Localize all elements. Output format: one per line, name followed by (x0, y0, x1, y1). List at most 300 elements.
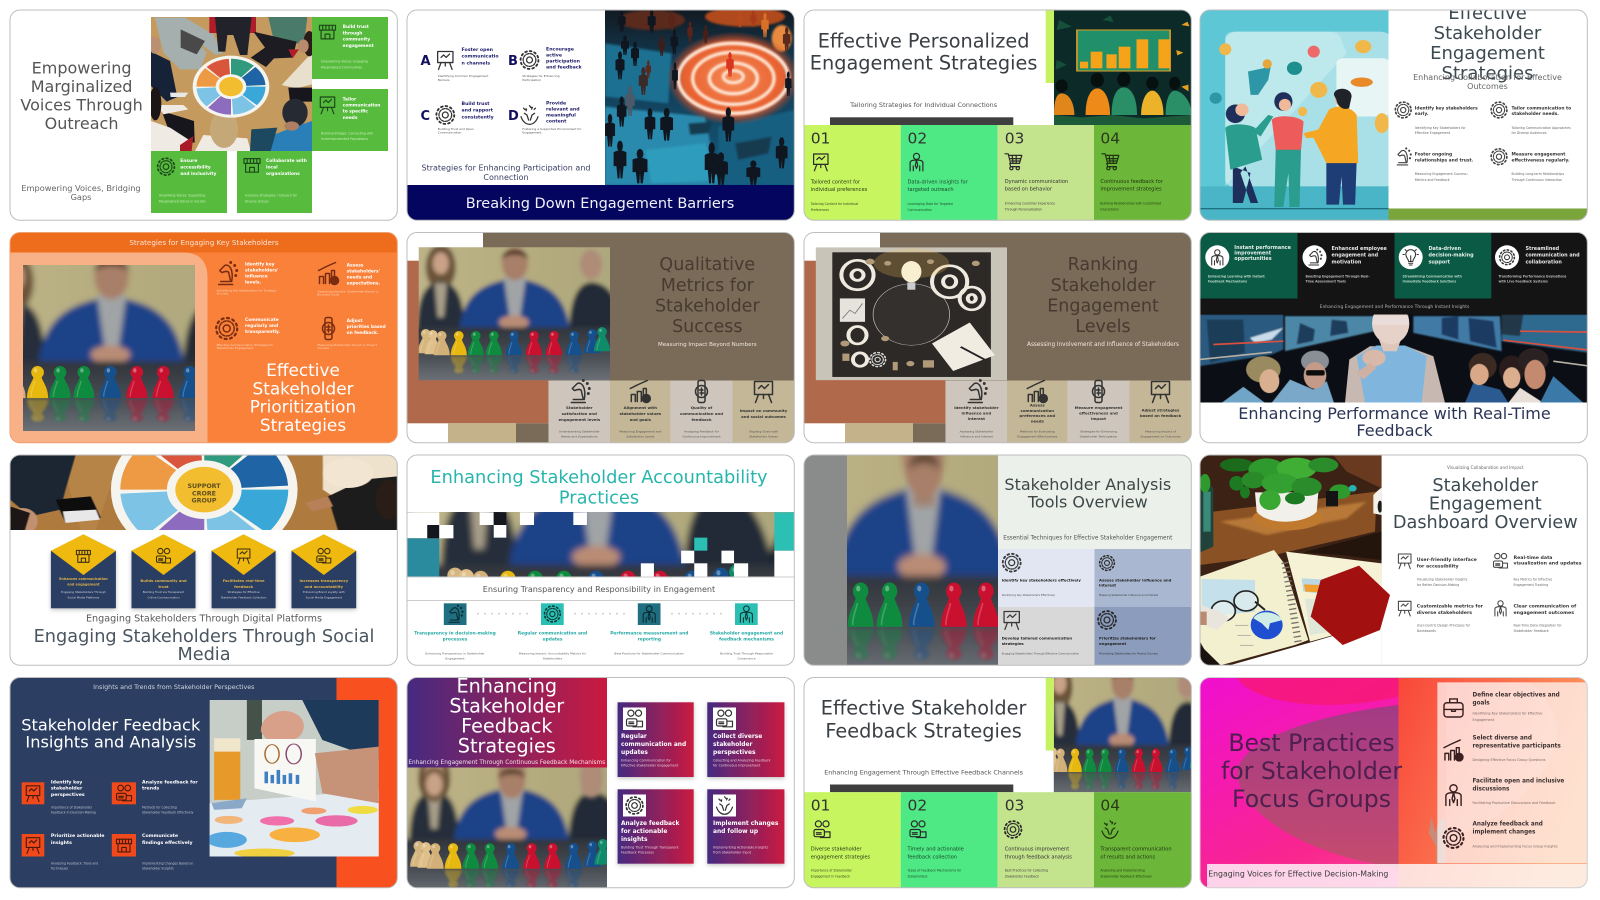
card: collect diverse (707, 702, 784, 777)
card: implement changes: Implementing Actionable Insights (713, 846, 768, 850)
item: customizable: User-Centric Design Principles for (1417, 624, 1470, 628)
title: Strategies (1442, 63, 1533, 84)
icon: people (1494, 553, 1508, 568)
panel: build trust: Build trust (343, 25, 369, 30)
card: identify (946, 380, 1007, 443)
item B: Participation (522, 78, 541, 82)
item: define: goals (1472, 701, 1490, 707)
slide 9: Engaging Stakeholders Through Social Media (7, 416, 401, 665)
slide 1: Empowering Marginalized Voices (10, 10, 398, 220)
item: measure: Measure engagement (1512, 152, 1565, 158)
slide 10: Enhancing Stakeholder Accountability Practices (348, 421, 860, 665)
item: select: representative participants (1472, 744, 1561, 750)
card: measure: Stakeholder Participation (1080, 434, 1117, 438)
panel: build trust: community (343, 37, 370, 43)
item: communicate: findings effectively (142, 840, 193, 846)
item: identify: Effective Engagement (1415, 131, 1451, 135)
item: select: Select diverse and (1472, 736, 1532, 742)
title: Insights and Analysis (25, 732, 196, 751)
item: identify (217, 262, 278, 296)
card: enhances communication: Enhances communication (59, 577, 108, 581)
item: select (1444, 736, 1561, 762)
card: quality (671, 380, 732, 443)
step: communication: updates (542, 636, 563, 642)
column 03: 03 (1005, 130, 1024, 148)
item: realtime: Real-time data (1514, 556, 1552, 561)
card: facilitates feedback: Stakeholder Feedback Collection (221, 595, 267, 599)
slide 11: Stakeholder Analysis Tools Overview (673, 411, 1192, 685)
column 03: Through Personalization (1004, 208, 1042, 212)
photo: team with holographic screens (1200, 314, 1587, 402)
item: assess: needs and (347, 274, 372, 280)
item C: and rapport (462, 108, 494, 114)
card: satisfaction (549, 380, 610, 443)
card: implement changes: Implement changes (713, 821, 778, 827)
panel: ensure accessibility: and inclusivity (180, 171, 217, 177)
item C (420, 101, 494, 135)
item: measure: Through Continuous Interaction (1510, 178, 1562, 182)
subtitle: Enhancing Engagement Through Continuous Feedback Mechanisms (408, 760, 605, 766)
column 01: Engagement in Feedback (811, 874, 850, 878)
card: identify: interest (968, 416, 985, 421)
subtitle: Enhancing Collaboration for Effective (1413, 73, 1562, 82)
title: Engagement (1430, 43, 1545, 64)
column: data-driven: support (1428, 259, 1451, 265)
item: communicate: Effective Communication Strategies for (217, 343, 273, 347)
column: instant performance: opportunities (1234, 256, 1272, 262)
item: identify (1395, 102, 1478, 135)
item D (508, 100, 582, 135)
title: Empowering (32, 58, 132, 77)
card: regular communication: Enhancing Communication for (621, 758, 671, 762)
card: alignment: Satisfaction Levels (626, 434, 655, 438)
column: streamlined: Transforming Performance Evaluations (1498, 274, 1566, 278)
icon: monitor (1398, 601, 1411, 616)
item: identify: stakeholder (51, 786, 83, 792)
title: Engagement (1429, 494, 1542, 514)
item D: Provide (546, 101, 566, 106)
panel: collaborate: Inclusive Strategies: Outreach for (245, 193, 297, 197)
icon: hands and stars (521, 106, 538, 124)
card: facilitates feedback: Facilitates real-time (223, 579, 264, 583)
panel: build trust: through (343, 30, 362, 36)
card: measure: Measure engagement (1075, 405, 1122, 410)
card: regular communication: updates (621, 750, 648, 756)
column 04: of results and actions (1100, 854, 1155, 860)
column 03: Best Practices for Collecting (1005, 868, 1048, 872)
icon: board (1004, 612, 1019, 629)
column: streamlined: communication and (1526, 253, 1580, 259)
item D: D (508, 109, 519, 124)
item: realtime: Key Metrics for Effective (1514, 578, 1552, 582)
item: adjust: Adjust (347, 319, 362, 324)
subtitle: Enhancing Engagement Through Effective Feedback Channels (824, 769, 1024, 777)
icon: gear head (216, 318, 237, 339)
card: collect diverse: for Continuous Improvement (713, 764, 761, 768)
item: communicate: Implementing Changes Based on (142, 862, 193, 866)
card: collect diverse: stakeholder (713, 742, 753, 748)
slide 8: Enhancing Performance with Real-Time Feedback (1200, 232, 1590, 443)
card: satisfaction: Stakeholder (566, 405, 593, 410)
icon: speaker (740, 606, 752, 622)
card: builds community: trust (158, 585, 169, 589)
item: adjust: priorities based (347, 324, 386, 330)
item A: Foster open (462, 48, 493, 53)
card: quality: Quality of (691, 405, 712, 410)
card: builds community: Building Trust via Transparent (143, 590, 184, 594)
item D: Engagement (522, 131, 542, 135)
panel: tailor communication (312, 89, 388, 151)
item A: n channels (462, 60, 490, 66)
cell: develop: strategies (1002, 641, 1024, 646)
mosaic squares (407, 512, 794, 577)
slide 6: Qualitative Metrics for Stakeholder Success (359, 232, 794, 443)
item D: content (546, 118, 567, 124)
cell: identify (998, 549, 1094, 607)
title: Stakeholder (449, 694, 564, 718)
item: identify: Identify key stakeholders (1415, 106, 1478, 111)
title: Effective Stakeholder (821, 696, 1026, 719)
item C: Communication (438, 131, 462, 135)
item C: C (420, 109, 430, 124)
card: quality: Continuous Improvement (682, 434, 721, 438)
panel: tailor communication: Underrepresented Populations (321, 137, 368, 141)
icon: people (814, 821, 830, 838)
step: stakeholder engagement: Governance (737, 657, 756, 661)
column: data-driven: Data-driven (1428, 246, 1461, 252)
card: assess (1007, 380, 1068, 443)
title: Media (177, 645, 231, 665)
slide 5: Effective Stakeholder Prioritization Strategies (0, 232, 398, 443)
title: Engagement Strategies (810, 52, 1037, 75)
panel: tailor communication: Building Bridges: Connecting with (321, 131, 373, 135)
card: analyze feedback: Building Trust Through Transparent (621, 846, 679, 850)
item: identify (22, 779, 96, 814)
photo: board with targets and bulb (816, 247, 1007, 380)
item: identify: Identifying Key Stakeholders for Strategic (217, 288, 277, 292)
item: tailor: Tailor communication to (1512, 106, 1571, 111)
cell: assess: Assess stakeholder influence and (1099, 577, 1171, 582)
icon: gears (521, 51, 538, 69)
card: identify: Assessing Stakeholder (959, 430, 993, 434)
card: analyze feedback: Feedback Processes (621, 850, 654, 854)
column 01: Preferences (811, 208, 829, 212)
item: communicate (112, 833, 193, 870)
item: prioritize: Prioritize actionable (51, 834, 104, 839)
card: assess: needs (1031, 418, 1045, 423)
title: Stakeholder (252, 378, 354, 398)
card: builds community: Builds community and (140, 579, 187, 583)
panel: collaborate: local (266, 164, 278, 170)
card: facilitates feedback: feedback (234, 585, 254, 589)
connector dots (477, 613, 722, 615)
step: transparency: processes (443, 636, 468, 642)
cell: prioritize: Prioritize stakeholders for (1099, 636, 1156, 641)
card: satisfaction: Needs and Expectations (561, 434, 598, 438)
icon: gear head (1491, 149, 1507, 165)
title: Levels (1075, 317, 1131, 337)
item: identify: Identify key (51, 780, 82, 785)
icon: chess (571, 380, 590, 402)
card: regular communication: communication and (621, 742, 686, 748)
item D: meaningful (546, 112, 576, 118)
icon: person (643, 606, 655, 622)
column 01 (804, 125, 901, 220)
card: facilitates feedback (212, 534, 276, 608)
step: performance: Performance measurement and (610, 631, 688, 636)
icon: board (438, 52, 453, 69)
item: measure: effectiveness regularly. (1512, 158, 1570, 164)
column 02 (901, 125, 998, 220)
icon: board (754, 382, 772, 402)
card: increases transparency: Enhancing Brand Loyalty with (303, 590, 345, 594)
step: transparency (414, 603, 496, 661)
subtitle: Strategies for Enhancing Participation and (422, 164, 590, 173)
item B: Strategies for Enhancing (522, 74, 559, 78)
column: streamlined: with Live Feedback Systems (1498, 280, 1548, 284)
title: Feedback Strategies (825, 719, 1022, 742)
card: satisfaction: engagement levels (558, 417, 601, 422)
item: identify: Success (217, 292, 229, 296)
column: instant performance: Feedback Mechanisms (1208, 280, 1247, 284)
item: customizable (1398, 601, 1484, 633)
title: Enhancing (457, 674, 557, 698)
column 01: Diverse stakeholder (811, 846, 862, 852)
title: Stakeholder (1051, 276, 1156, 296)
item: prioritize (22, 833, 104, 870)
column 01: Tailored content for (811, 180, 860, 186)
column: data-driven: Streamlining Communication with (1402, 274, 1462, 278)
icon: chart (1027, 380, 1047, 402)
icon: people (716, 710, 732, 727)
title: Dashboard Overview (1393, 513, 1578, 533)
icon: monitor (26, 838, 40, 853)
title: Voices Through (20, 96, 143, 115)
card: regular communication: Regular (621, 734, 647, 740)
card: enhances communication: Social Media Platforms (68, 595, 100, 599)
icon: chess (219, 262, 237, 284)
photo: desk with plant and notebook, red hexagon overlay (1200, 456, 1390, 665)
card: adjust: Adjust strategies (1142, 408, 1179, 412)
column 02: Leveraging Data for Targeted (908, 202, 953, 206)
panel: ensure accessibility: Ensure (180, 159, 197, 164)
cell: prioritize: engagement (1099, 641, 1126, 646)
photo: three people with pawns (418, 247, 610, 380)
panel: tailor communication: communication (343, 103, 380, 109)
item A: Identifying Common Engagement (438, 74, 488, 78)
icon: monitor (814, 154, 828, 171)
step: transparency: Enhancing Transparency in Stakeholder (425, 651, 485, 655)
item: clear communication: Stakeholder Feedback (1514, 629, 1549, 633)
title: Effective (1448, 3, 1527, 24)
column 02: 02 (908, 796, 927, 814)
card: alignment: Measuring Engagement and (619, 430, 661, 434)
step: communication: Measuring Impact: Accountability Metrics for (519, 651, 586, 655)
icon: chess (449, 605, 463, 622)
card: implement changes: from Stakeholder Input (713, 850, 752, 854)
item: communicate: Stakeholder Insights (142, 866, 174, 870)
column 04: Stakeholder Feedback Effectively (1100, 874, 1152, 878)
column 02: targeted outreach (908, 187, 954, 193)
icon: hand and nodes (716, 797, 732, 814)
item: facilitate: Facilitate open and inclusive (1472, 778, 1564, 784)
photo: man with pawns (847, 456, 998, 665)
item: tailor: stakeholder needs. (1512, 111, 1559, 117)
icon: speaker (1495, 601, 1506, 616)
card: collect diverse: Collecting and Analyzing Feedback (713, 758, 770, 762)
icon: projector (1100, 556, 1114, 570)
column: data-driven: decision-making (1428, 253, 1474, 259)
column 04: improvement strategies (1100, 187, 1162, 193)
icon: gear head (1098, 611, 1116, 629)
icon: network (1003, 554, 1021, 572)
item: identify: Identifying Key Stakeholders for (1415, 126, 1466, 130)
subtitle: Connection (483, 173, 529, 182)
item C: Build trust (462, 102, 490, 107)
column: streamlined: Streamlined (1526, 246, 1559, 252)
item: select: Designing Effective Focus Group Questions (1472, 758, 1546, 762)
icon: monitor (26, 786, 40, 802)
step: performance: reporting (638, 636, 661, 642)
title: Strategies (458, 734, 556, 758)
icon: data person (910, 153, 923, 171)
panel: build trust (312, 17, 388, 79)
item: customizable: diverse stakeholders (1417, 610, 1472, 616)
card: impact: and social outcomes (741, 414, 787, 419)
item: communicate: Communicate (245, 318, 279, 323)
icon: tailor (320, 97, 335, 114)
title: Stakeholder (1432, 476, 1538, 496)
column 04: 04 (1100, 796, 1120, 814)
item: assess: stakeholders' (347, 268, 380, 274)
card: adjust: based on feedback (1140, 413, 1182, 418)
slide 2: Breaking Down Engagement Barriers (407, 7, 800, 220)
icon: shop (76, 550, 90, 562)
photo strip: blurred meeting with mosaic (408, 512, 794, 576)
card: enhances communication: Engaging Stakeholders Through (61, 590, 106, 594)
item: identify: stakeholders' (245, 268, 278, 274)
item: analyze: implement changes (1472, 830, 1536, 836)
cell: identify: Identify key stakeholders effectively (1002, 577, 1081, 582)
item: identify: levels. (245, 280, 261, 286)
item: analyze: Analyze feedback and (1472, 822, 1543, 828)
subtitle: Empowering Voices, Bridging (21, 183, 141, 193)
orange strip (336, 678, 398, 888)
column 04 (1094, 125, 1192, 220)
item: foster: Metrics and Feedback (1415, 178, 1450, 182)
card: satisfaction: Understanding Stakeholder (559, 430, 600, 434)
title: Enhancing Stakeholder Accountability (430, 467, 768, 488)
column 01: 01 (811, 796, 830, 814)
card: increases transparency (292, 534, 356, 608)
card: identify: Influence and Interest (960, 434, 994, 438)
item: communicate: transparently. (245, 329, 280, 335)
title: Stakeholder Analysis (1004, 475, 1171, 494)
item: analyze: Analyzing and Implementing Focus Group Insights (1472, 845, 1558, 849)
item: assess: expectations. (347, 280, 381, 286)
card: assess: Assess (1030, 402, 1045, 408)
item: measure (1491, 149, 1570, 182)
photo: support circle wheel (10, 456, 397, 530)
title: Practices (559, 487, 639, 508)
icon: chess (1397, 148, 1411, 165)
item: analyze: Stakeholder Feedback Effectively (142, 810, 194, 814)
panel: build trust: engagement (343, 43, 374, 49)
peach panel (10, 252, 208, 443)
title: Outreach (45, 114, 119, 133)
item B: active (546, 52, 562, 58)
icon: community (320, 25, 336, 39)
photo: people with pawns (1054, 678, 1191, 792)
icon: briefcase (1444, 699, 1463, 717)
item: foster: Foster ongoing (1415, 152, 1452, 158)
title: Metrics for (661, 276, 755, 296)
title: Qualitative (659, 255, 755, 275)
panel: ensure accessibility: Marginalized Voices in Society (159, 199, 206, 203)
column: enhanced employee: Enhanced employee (1332, 246, 1387, 252)
icon: house money (1444, 740, 1463, 761)
icon: gear head (436, 106, 454, 124)
column: streamlined (1495, 245, 1580, 284)
card: quality: feedback (691, 417, 712, 422)
step: communication: Regular communication and (518, 631, 587, 636)
card: implement changes (707, 789, 784, 864)
title: Tools Overview (1027, 492, 1148, 511)
card: alignment (610, 380, 671, 443)
item: assess: Assess (347, 264, 363, 268)
column 02: Data-driven insights for (908, 180, 968, 186)
card: impact: Impact on community (740, 408, 787, 413)
item: foster (1397, 148, 1474, 182)
subtitle: Essential Techniques for Effective Stakeholder Engagement (1003, 536, 1173, 542)
item B: participation (546, 58, 580, 64)
icon: person (1446, 785, 1461, 805)
cell: develop (998, 607, 1094, 665)
photo: man with pawns (23, 265, 195, 431)
panel: build trust: Marginalized Communities (321, 65, 362, 69)
card: assess: Engagement Effectiveness (1017, 434, 1058, 438)
subtitle: Measuring Impact Beyond Numbers (658, 342, 757, 348)
card: quality: Analyzing Feedback for (684, 430, 719, 434)
title: Prioritization (250, 397, 356, 417)
item: tailor: Tailoring Communication Approaches (1512, 126, 1571, 130)
item: facilitate: Facilitating Productive Discussions and Feedback (1472, 801, 1555, 805)
item: clear communication: engagement outcomes (1514, 610, 1574, 616)
lime accent strip (1046, 678, 1054, 750)
item: tailor: for Diverse Audiences (1512, 131, 1547, 135)
column: instant performance (1200, 232, 1298, 298)
card: alignment: stakeholder values (619, 411, 662, 416)
step: transparency: Engagement (445, 657, 465, 661)
header band (10, 232, 398, 252)
item: communicate: Stakeholder Engagement (217, 346, 254, 350)
column: streamlined: collaboration (1526, 259, 1562, 265)
column 02: Timely and actionable (908, 846, 964, 852)
title: Ranking (1068, 255, 1138, 275)
item: prioritize: Techniques (50, 866, 68, 870)
title: Best Practices (1228, 729, 1395, 757)
footer caption: Engaging Voices for Effective Decision-Making (1208, 869, 1388, 878)
column 02: Stakeholders (908, 874, 928, 878)
item: tailor (1491, 102, 1571, 135)
card: analyze feedback: insights (621, 837, 648, 843)
item A: A (420, 54, 431, 69)
lime accent strip (1046, 10, 1054, 83)
wheel label: GROUP (191, 497, 217, 504)
title: Effective Personalized (818, 30, 1029, 52)
column 02: Communication (908, 208, 932, 212)
icon: accessibility (158, 158, 174, 175)
